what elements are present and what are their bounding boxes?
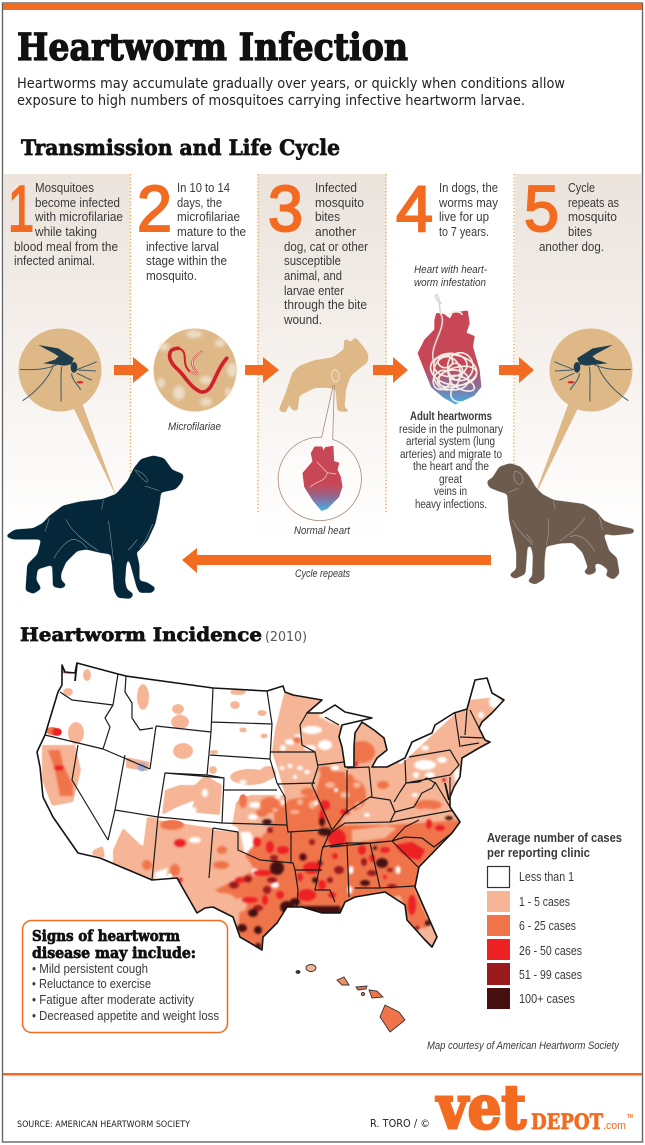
icon: infested heart	[419, 295, 480, 403]
panel: signs of heartworm disease: • Mild persistent cough	[32, 962, 148, 976]
step 1 text	[8, 172, 123, 268]
legend: average number of cases: 6 - 25 cases	[519, 919, 576, 933]
intro text	[17, 76, 565, 109]
step 3 text: dog, cat or other	[284, 240, 368, 254]
step 2 text: days, the	[177, 196, 222, 210]
text: adult heartworms: great	[439, 474, 463, 486]
panel: signs of heartworm disease: Signs of heartworm	[32, 928, 181, 945]
step 3 text	[268, 172, 368, 327]
panel: column 3 background	[258, 174, 386, 540]
step 5 text: repeats as	[568, 196, 619, 210]
step 3 text: mosquito	[315, 196, 364, 210]
logo: vet depot: DEPOT	[531, 1109, 603, 1134]
icon: dog with normal heart	[278, 338, 367, 521]
step 1 text: while taking	[34, 225, 97, 239]
step 1 text: with microfilariae	[34, 210, 123, 224]
step 3 text: Infected	[315, 181, 357, 195]
east base	[170, 690, 510, 955]
step 1 text: become infected	[35, 196, 120, 210]
legend: average number of cases: Average number of cases	[487, 831, 622, 845]
credit: R. TORO / ©	[370, 1118, 430, 1130]
step 3 text: another	[315, 225, 356, 239]
step 5 text	[524, 172, 619, 254]
section heading: transmission and life cycle: Transmission and Life Cycle	[21, 135, 340, 160]
step 5 text: Cycle	[568, 181, 595, 195]
legend: average number of cases: 51 - 99 cases	[519, 968, 582, 982]
text: adult heartworms: arterial system (lung	[406, 436, 495, 448]
panel: column 1 background	[4, 174, 130, 534]
step 4 text: 4	[396, 172, 433, 245]
text: adult heartworms: veins in	[434, 486, 467, 498]
text: adult heartworms: heavy infections.	[415, 499, 487, 511]
arrow: step 2 to 3	[245, 357, 279, 383]
step 2 text: mature to the	[177, 225, 246, 239]
legend: average number of cases: 26 - 50 cases	[519, 944, 582, 958]
arrow: step 1 to 2	[114, 357, 149, 383]
step 4 text: to 7 years.	[439, 225, 489, 239]
legend: average number of cases: 1 - 5 cases	[519, 895, 570, 909]
step 4 text: worms may	[438, 196, 499, 210]
map: heartworm incidence by state	[37, 663, 510, 1032]
label: normal heart: Normal heart	[294, 525, 351, 537]
step 5 text: 5	[524, 172, 559, 245]
text: adult heartworms: reside in the pulmonary	[399, 424, 503, 436]
logo: vet depot: vet	[435, 1073, 526, 1143]
text: adult heartworms: the heart and the	[413, 461, 489, 473]
section heading: heartworm incidence: Heartworm Incidence	[20, 624, 262, 646]
step 1 text: infected animal.	[14, 254, 95, 268]
light overlays in medium zone	[220, 781, 433, 931]
step 1 text: Mosquitoes	[35, 181, 94, 195]
icon: microfilariae circle	[154, 328, 237, 412]
text: adult heartworms: arteries) and migrate to	[400, 449, 502, 461]
step 2 text: 2	[137, 172, 172, 245]
text: adult heartworms: Adult heartworms	[410, 411, 492, 423]
source: SOURCE: AMERICAN HEARTWORM SOCIETY	[17, 1120, 190, 1130]
logo: vet depot: TM	[627, 1114, 633, 1120]
step 1 text: 1	[8, 172, 34, 245]
footer rule	[3, 1073, 642, 1076]
panel: signs of heartworm disease: disease may include:	[32, 945, 196, 962]
alaska and hawaii islands	[296, 964, 405, 1032]
label: microfilariae: Microfilariae	[168, 421, 221, 433]
logo: vet depot	[435, 1073, 633, 1143]
icon: brown dog	[488, 464, 633, 583]
step 3 text: susceptible	[284, 254, 341, 268]
step 3 text: 3	[268, 172, 303, 245]
arrow: step 3 to 4	[373, 357, 408, 383]
step 3 text: larvae enter	[284, 284, 344, 298]
label: heart with heartworm infestation	[414, 264, 487, 289]
icon: mosquito bubble left	[18, 328, 117, 498]
map credit: Map courtesy of American Heartworm Society	[427, 1040, 620, 1052]
legend: average number of cases: Less than 1	[519, 870, 574, 884]
51-99 cases	[229, 827, 420, 930]
logo: vet depot: .com	[603, 1120, 626, 1132]
intro text: Heartworms may accumulate gradually over years, or quickly when conditions allow	[17, 76, 565, 92]
step 3 text: wound.	[283, 313, 322, 327]
label: cycle repeats: Cycle repeats	[295, 568, 350, 580]
step 3 text: through the bite	[284, 298, 367, 312]
step 4 text: live for up	[439, 210, 489, 224]
step 2 text: In 10 to 14	[177, 181, 230, 195]
panel: signs of heartworm disease: • Fatigue after moderate activity	[32, 993, 195, 1007]
text: adult heartworms	[399, 411, 503, 511]
top orange bar	[3, 3, 642, 10]
panel: signs of heartworm disease: • Decreased appetite and weight loss	[32, 1009, 219, 1023]
intro text: exposure to high numbers of mosquitoes carrying infective heartworm larvae.	[17, 93, 525, 109]
section heading: heartworm incidence: (2010)	[265, 630, 307, 645]
label: heart with heartworm infestation: Heart with heart-	[414, 264, 487, 276]
panel: signs of heartworm disease	[22, 920, 228, 1032]
arrow: step 4 to 5	[499, 357, 534, 383]
step 4 text	[396, 172, 499, 245]
panel: signs of heartworm disease: • Reluctance to exercise	[32, 977, 151, 991]
100+ cases	[237, 816, 453, 949]
white holes	[155, 696, 501, 880]
step 4 text: In dogs, the	[439, 181, 498, 195]
west light	[42, 669, 510, 955]
step 2 text: microfilariae	[177, 210, 240, 224]
26-50 cases	[52, 728, 446, 915]
panel: column 5 background	[515, 174, 641, 534]
icon: mosquito bubble right	[533, 328, 632, 500]
label: heart with heartworm infestation: worm infestation	[414, 277, 486, 289]
step 3 text: bites	[315, 210, 340, 224]
step 5 text: mosquito	[568, 210, 617, 224]
legend: average number of cases: 100+ cases	[519, 992, 575, 1006]
step 5 text: bites	[568, 225, 592, 239]
step 1 text: blood meal from the	[14, 240, 118, 254]
icon: black dog	[7, 457, 182, 598]
step 3 text: animal, and	[284, 269, 342, 283]
arrow: cycle repeats	[182, 548, 491, 573]
step 5 text: another dog.	[539, 240, 604, 254]
step 2 text: stage within the	[146, 254, 227, 268]
step 2 text: infective larval	[146, 240, 219, 254]
state borders	[45, 674, 485, 907]
legend: average number of cases	[487, 831, 622, 1009]
title: Heartworm Infection	[17, 25, 408, 69]
step 2 text	[137, 172, 246, 283]
legend: average number of cases: per reporting clinic	[487, 846, 590, 860]
medium	[46, 665, 460, 950]
step 2 text: mosquito.	[146, 269, 197, 283]
